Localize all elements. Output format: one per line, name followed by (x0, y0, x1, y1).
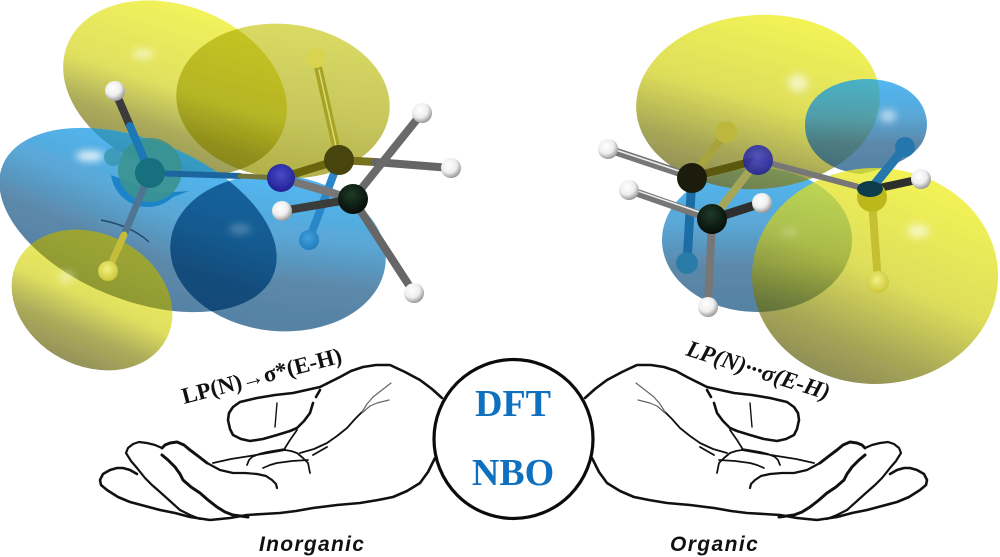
right hand (585, 365, 927, 520)
inner sphere near carbon (111, 138, 189, 207)
overlap of lower yellow and blue (752, 237, 852, 312)
orbital lobe: upper yellow (630, 7, 886, 197)
left hand (100, 365, 442, 520)
orbital lobe: upper yellow front (37, 0, 313, 207)
label: inorganic interaction: LP(N)→σ*(E-H) (179, 343, 344, 409)
caption: Organic: Organic (670, 533, 759, 556)
right molecule with orbital lobes (598, 7, 998, 384)
thumb crease (275, 403, 277, 427)
atoms (598, 121, 931, 317)
left molecule with orbital lobes (0, 0, 461, 398)
orbital highlights (58, 49, 251, 282)
overlap of lower yellow and blue (31, 230, 172, 311)
orbital lobe: long blue left (0, 91, 303, 349)
orbital lobe: lower blue (662, 168, 852, 312)
heading: NBO: NBO (472, 452, 554, 494)
thin dark contour (101, 220, 149, 242)
orbital lobe: lower yellow (752, 168, 998, 384)
hand outline: wrist and little finger (100, 458, 435, 520)
palm lines (300, 412, 362, 455)
hand outline: back and thumb (228, 365, 442, 441)
orbital lobe: small blue (805, 79, 927, 174)
bonds (608, 132, 921, 307)
orbital lobe: lower blue right (162, 164, 394, 342)
orbital lobe: upper yellow back (169, 13, 397, 189)
orbital lobe: lower yellow (0, 202, 197, 398)
palm creases (207, 463, 277, 488)
caption: Inorganic: Inorganic (259, 533, 365, 556)
overlap of blue lobes (170, 181, 277, 312)
overlap of upper yellow lobes (176, 29, 287, 170)
fingers (126, 442, 200, 519)
orbital highlights (782, 74, 929, 238)
bonds (108, 58, 451, 293)
center circle (434, 360, 593, 518)
label: organic interaction: LP(N)···σ(E-H) (682, 336, 833, 406)
heading: DFT: DFT (475, 383, 551, 425)
atoms (98, 48, 461, 303)
